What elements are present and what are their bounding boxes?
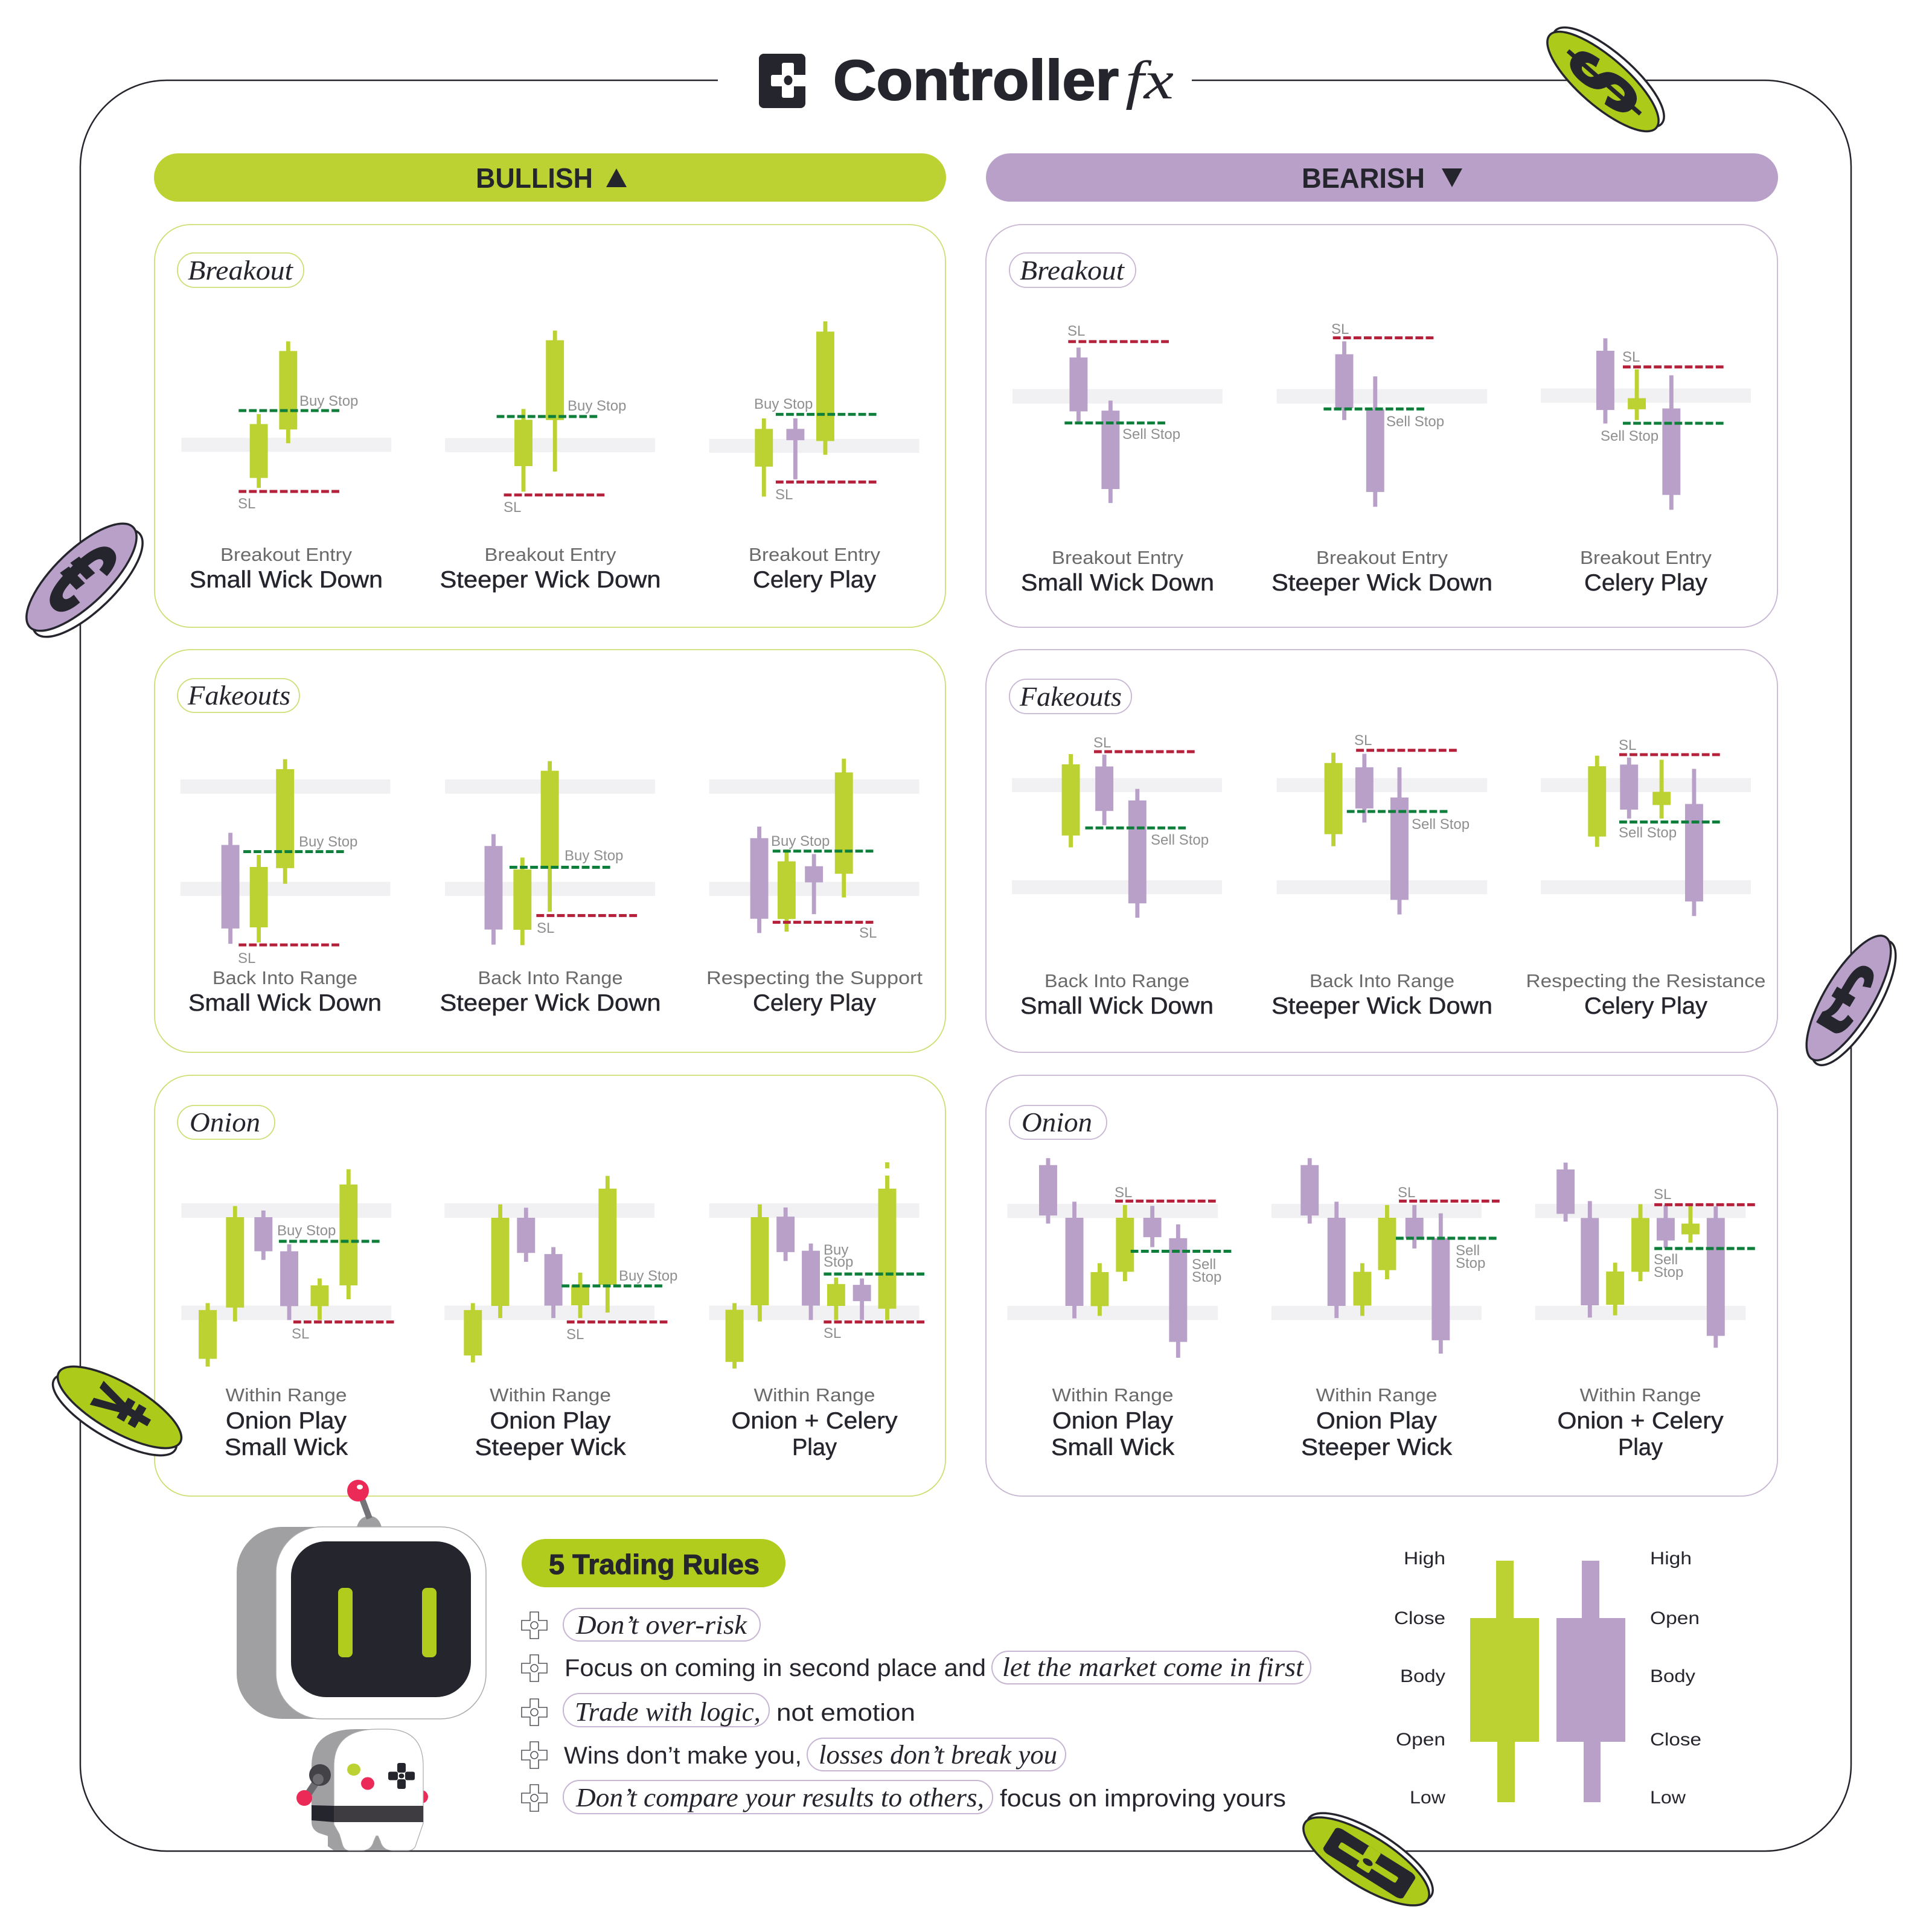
robot antenna: [347, 1480, 382, 1527]
caption: [190, 544, 383, 593]
caption: [440, 967, 661, 1016]
body buttons: [347, 1764, 374, 1790]
caption: Breakout Entry: [220, 544, 353, 565]
chart: small wick down: Sell Stop: [1122, 426, 1180, 443]
pill: Onion: [1009, 1105, 1107, 1139]
highlighted text: let the market come in first: [1002, 1652, 1305, 1682]
caption: Within Range: [1052, 1384, 1174, 1406]
icon: cross bullet: [522, 1699, 547, 1726]
chart: onion play steeper wick: SL: [1398, 1185, 1415, 1201]
chart: back into range small wick: SL: [1093, 735, 1111, 751]
chart: back into range small wick: SL: [238, 950, 255, 967]
caption: Back Into Range: [1044, 970, 1189, 991]
caption: Within Range: [1579, 1384, 1701, 1406]
bullish labels: Low: [1410, 1788, 1445, 1808]
chart: small wick down: SL: [1067, 323, 1085, 339]
rule 4: [522, 1738, 1066, 1771]
chart: onion play steeper wick: Sell: [1456, 1243, 1480, 1259]
legend: candle anatomy: [1394, 1549, 1701, 1808]
bearish labels: [1650, 1549, 1701, 1808]
caption: Breakout Entry: [484, 544, 616, 565]
title: Controller fx logo: [759, 48, 1174, 112]
bearish labels: Body: [1650, 1666, 1695, 1686]
chart: small wick down: SL: [238, 496, 255, 512]
chart: respecting the resistance: [1541, 737, 1751, 916]
mascot: robot: [237, 1480, 486, 1850]
coin: yen: ¥: [75, 1373, 170, 1442]
robot head: [237, 1527, 486, 1719]
highlighted text: losses don’t break you: [819, 1740, 1057, 1770]
chart: back into range steeper wick: Buy Stop: [565, 848, 623, 864]
caption: [749, 544, 881, 593]
caption: Small Wick Down: [190, 567, 383, 593]
caption: [1526, 970, 1765, 1019]
panel: bullish fakeouts: [155, 650, 945, 1052]
chart: onion plus celery play: Stop: [824, 1254, 853, 1270]
highlighted text: Trade with logic,: [575, 1697, 761, 1727]
caption: Onion Play: [490, 1408, 611, 1434]
icon: controller logo: [759, 54, 805, 108]
pill: Breakout: Breakout: [1020, 255, 1125, 286]
caption: Small Wick Down: [188, 990, 382, 1016]
caption: [1271, 970, 1492, 1019]
caption: Within Range: [490, 1384, 611, 1406]
body d-pad: [388, 1763, 415, 1789]
caption: Onion Play: [1316, 1408, 1438, 1434]
chart: onion play steeper wick: Stop: [1456, 1255, 1485, 1271]
pill: Fakeouts: Fakeouts: [187, 680, 290, 711]
chart: onion plus celery play: Buy: [824, 1242, 848, 1258]
caption: [1301, 1384, 1453, 1460]
caption: [1020, 970, 1214, 1019]
caption: Steeper Wick: [1301, 1435, 1453, 1460]
chart: celery play: SL: [775, 487, 793, 503]
header: bearish: [986, 153, 1778, 202]
chart: small wick down: [181, 341, 391, 512]
chart: back into range steeper wick: [1277, 732, 1487, 915]
icon: up triangle: [606, 168, 627, 187]
bullish labels: [1394, 1549, 1445, 1808]
caption: Within Range: [753, 1384, 875, 1406]
chart: onion play small wick: Stop: [1192, 1269, 1221, 1285]
coin: pound: [1791, 924, 1911, 1076]
coin: euro: €: [23, 520, 139, 635]
chart: onion plus celery play: Stop: [1654, 1264, 1683, 1281]
caption: Celery Play: [1584, 993, 1708, 1019]
caption: Breakout Entry: [749, 544, 881, 565]
chart: back into range small wick: [1012, 735, 1222, 918]
caption: [1051, 1384, 1175, 1460]
caption: Back Into Range: [213, 967, 357, 988]
chart: onion plus celery play: SL: [824, 1325, 841, 1342]
rule text: Wins don’t make you,: [564, 1742, 802, 1769]
caption: [1271, 547, 1492, 596]
bullish labels: Open: [1396, 1730, 1445, 1750]
icon: cross bullet: [522, 1742, 547, 1768]
coin: controller logo: [1291, 1797, 1445, 1921]
header: bullish: [154, 153, 946, 202]
wordmark: Controller: [833, 48, 1119, 112]
chart: onion play small wick: [1007, 1158, 1233, 1358]
chart: back into range steeper wick: SL: [537, 920, 554, 936]
caption: Small Wick: [225, 1435, 348, 1460]
caption: Respecting the Resistance: [1526, 970, 1765, 991]
pill: Onion: Onion: [1022, 1107, 1092, 1137]
chart: back into range small wick: [181, 759, 391, 967]
chart: small wick down: [1012, 323, 1223, 503]
caption: Small Wick: [1051, 1435, 1175, 1460]
chart: steeper wick down: [445, 330, 655, 516]
coin: dollar: [1534, 13, 1678, 146]
caption: Breakout Entry: [1316, 547, 1448, 568]
panel: bearish breakout: [986, 225, 1777, 627]
pill: Onion: Onion: [190, 1107, 260, 1137]
caption: Celery Play: [753, 567, 877, 593]
caption: Onion Play: [1052, 1408, 1174, 1434]
bearish candle: [1556, 1561, 1625, 1802]
caption: Steeper Wick: [475, 1435, 626, 1460]
caption: Play: [792, 1435, 837, 1460]
chart: onion play small wick: Buy Stop: [277, 1223, 336, 1239]
caption: Onion + Celery: [732, 1408, 898, 1434]
chart: onion plus celery play: Sell: [1654, 1252, 1678, 1268]
chart: celery play: SL: [1622, 349, 1640, 365]
chart: onion plus celery play: SL: [1654, 1186, 1671, 1203]
chart: back into range steeper wick: [445, 761, 655, 945]
bearish labels: High: [1650, 1549, 1692, 1569]
caption: Respecting the Support: [706, 967, 923, 988]
panel: bearish fakeouts: [986, 650, 1777, 1052]
chart: onion play small wick: Sell: [1192, 1256, 1216, 1273]
chart: back into range steeper wick: SL: [1354, 732, 1372, 749]
rule text: not emotion: [776, 1700, 915, 1726]
caption: [1021, 547, 1214, 596]
robot body: [296, 1729, 428, 1850]
chart: onion play steeper wick: [444, 1176, 677, 1363]
chart: back into range small wick: Sell Stop: [1151, 832, 1209, 848]
caption: Steeper Wick Down: [440, 990, 661, 1016]
chart: back into range steeper wick: Sell Stop: [1412, 816, 1470, 833]
chart: respecting the resistance: SL: [1619, 737, 1636, 753]
coin: dollar: $: [1544, 28, 1662, 136]
coin: pound: £: [1805, 942, 1891, 1057]
caption: Breakout Entry: [1052, 547, 1184, 568]
caption: [225, 1384, 348, 1460]
wordmark fx: fx: [1125, 51, 1174, 110]
pill: Onion: [178, 1105, 275, 1139]
panel: bullish breakout: [155, 225, 945, 627]
caption: Within Range: [226, 1384, 347, 1406]
coin: yen: [42, 1351, 192, 1471]
caption: Play: [1618, 1435, 1663, 1460]
chart: small wick down: Buy Stop: [299, 393, 358, 409]
icon: cross bullet: [522, 1612, 547, 1639]
chart: respecting the support: Buy Stop: [771, 833, 830, 849]
bearish labels: Low: [1650, 1788, 1686, 1808]
caption: [706, 967, 923, 1016]
icon: cross bullet: [522, 1655, 547, 1681]
header: bullish: BULLISH: [476, 162, 593, 194]
chart: respecting the support: [709, 759, 919, 941]
bearish labels: Open: [1650, 1608, 1700, 1628]
pill: Fakeouts: Fakeouts: [1019, 681, 1122, 712]
caption: Back Into Range: [1310, 970, 1454, 991]
bearish labels: Close: [1650, 1730, 1701, 1750]
chart: steeper wick down: Buy Stop: [568, 398, 626, 414]
caption: Steeper Wick Down: [1271, 993, 1492, 1019]
caption: Onion + Celery: [1558, 1408, 1724, 1434]
chart: steeper wick down: [1277, 321, 1487, 507]
caption: Back Into Range: [478, 967, 623, 988]
bullish candle: [1470, 1561, 1539, 1802]
caption: Steeper Wick Down: [1271, 570, 1492, 596]
chart: respecting the resistance: Sell Stop: [1619, 825, 1677, 841]
caption: Within Range: [1316, 1384, 1437, 1406]
chart: onion play steeper wick: Buy Stop: [619, 1268, 677, 1284]
chart: onion play small wick: SL: [1115, 1185, 1132, 1201]
chart: celery play: Buy Stop: [754, 396, 813, 412]
pill: Breakout: Breakout: [188, 255, 293, 286]
chart: back into range small wick: Buy Stop: [299, 834, 357, 850]
caption: Steeper Wick Down: [440, 567, 661, 593]
rules heading: 5 Trading Rules: [549, 1549, 760, 1580]
caption: Breakout Entry: [1580, 547, 1712, 568]
header: bearish: BEARISH: [1302, 162, 1425, 194]
caption: [1580, 547, 1712, 596]
chart: steeper wick down: SL: [504, 499, 521, 516]
highlighted text: Don’t over-risk: [575, 1610, 748, 1640]
rule text: Focus on coming in second place and: [565, 1655, 986, 1681]
bullish labels: High: [1404, 1549, 1445, 1569]
chart: respecting the support: SL: [859, 925, 877, 941]
chart: onion play steeper wick: SL: [566, 1326, 584, 1343]
chart: onion play small wick: SL: [292, 1326, 309, 1342]
coin: euro: [11, 508, 158, 653]
bullish labels: Close: [1394, 1608, 1445, 1628]
panel: bearish onion: [986, 1075, 1777, 1496]
caption: Small Wick Down: [1020, 993, 1214, 1019]
rule 5: [522, 1780, 1286, 1814]
bullish labels: Body: [1400, 1666, 1445, 1686]
rules heading: [522, 1539, 785, 1587]
rule 3: [522, 1694, 915, 1727]
chart: steeper wick down: SL: [1331, 321, 1349, 337]
caption: [440, 544, 661, 593]
caption: [188, 967, 382, 1016]
icon: down triangle: [1442, 168, 1462, 187]
chart: onion play small wick: [181, 1169, 396, 1367]
icon: cross bullet: [522, 1785, 547, 1811]
caption: [475, 1384, 626, 1460]
caption: Celery Play: [1584, 570, 1708, 596]
caption: [1558, 1384, 1724, 1460]
panel: bullish onion: [155, 1075, 945, 1496]
caption: Celery Play: [753, 990, 877, 1016]
caption: [732, 1384, 898, 1460]
highlighted text: Don’t compare your results to others,: [575, 1783, 984, 1812]
rule 1: [522, 1608, 760, 1641]
rule 2: [522, 1651, 1311, 1684]
body joystick: [296, 1764, 331, 1806]
chart: onion plus celery play: [1535, 1163, 1757, 1348]
rule text: focus on improving yours: [1000, 1785, 1286, 1812]
chart: celery play: [1541, 338, 1751, 510]
chart: celery play: [709, 321, 919, 503]
caption: Small Wick Down: [1021, 570, 1214, 596]
chart: onion play steeper wick: [1271, 1158, 1502, 1354]
chart: onion plus celery play: [709, 1162, 926, 1369]
chart: steeper wick down: Sell Stop: [1386, 414, 1444, 430]
chart: celery play: Sell Stop: [1601, 428, 1659, 444]
caption: Onion Play: [226, 1408, 347, 1434]
